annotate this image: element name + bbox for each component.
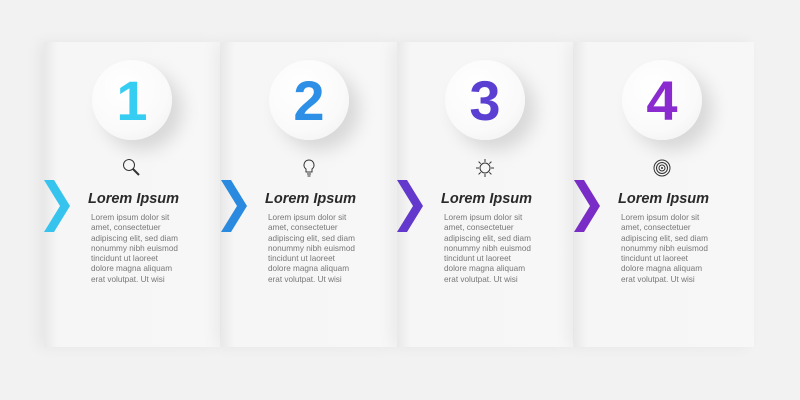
- text block 2: [268, 213, 355, 284]
- text block 3: dolore magna aliquam: [444, 264, 525, 273]
- panel: step 3: [397, 42, 573, 347]
- text block 1: adipiscing elit, sed diam: [91, 234, 178, 243]
- icon: bulb: [303, 160, 314, 176]
- text block 2: Lorem ipsum dolor sit: [268, 213, 346, 222]
- heading 2: Lorem Ipsum: [265, 191, 356, 207]
- text block 4: dolore magna aliquam: [621, 264, 702, 273]
- heading 1: Lorem Ipsum: [88, 191, 179, 207]
- text block 4: Lorem ipsum dolor sit: [621, 213, 699, 222]
- text block 2: tincidunt ut laoreet: [268, 254, 335, 263]
- chevron arrow 1: [44, 180, 70, 232]
- text block 2: nonummy nibh euismod: [268, 244, 355, 253]
- number circle 3: 3: [469, 69, 501, 132]
- text block 3: amet, consectetuer: [444, 223, 514, 232]
- icon: gear: [476, 159, 494, 177]
- text block 2: dolore magna aliquam: [268, 264, 349, 273]
- number circle 2: [269, 60, 349, 140]
- number circle 2: 2: [293, 69, 325, 132]
- text block 2: amet, consectetuer: [268, 223, 338, 232]
- heading 4: Lorem Ipsum: [618, 191, 709, 207]
- text block 1: [91, 213, 178, 284]
- number circle 1: 1: [116, 69, 148, 132]
- text block 2: erat volutpat. Ut wisi: [268, 275, 342, 284]
- text block 3: adipiscing elit, sed diam: [444, 234, 531, 243]
- number circle 3: [445, 60, 525, 140]
- number circle 4: 4: [646, 69, 678, 132]
- text block 1: nonummy nibh euismod: [91, 244, 178, 253]
- text block 3: tincidunt ut laoreet: [444, 254, 511, 263]
- text block 3: erat volutpat. Ut wisi: [444, 275, 518, 284]
- text block 4: tincidunt ut laoreet: [621, 254, 688, 263]
- text block 3: [444, 213, 531, 284]
- text block 2: adipiscing elit, sed diam: [268, 234, 355, 243]
- text block 4: adipiscing elit, sed diam: [621, 234, 708, 243]
- text block 4: [621, 213, 708, 284]
- chevron arrow 2: [221, 180, 247, 232]
- text block 1: dolore magna aliquam: [91, 264, 172, 273]
- chevron arrow 4: [574, 180, 600, 232]
- text block 4: erat volutpat. Ut wisi: [621, 275, 695, 284]
- text block 3: nonummy nibh euismod: [444, 244, 531, 253]
- text block 1: tincidunt ut laoreet: [91, 254, 158, 263]
- text block 1: erat volutpat. Ut wisi: [91, 275, 165, 284]
- text block 4: nonummy nibh euismod: [621, 244, 708, 253]
- heading 3: Lorem Ipsum: [441, 191, 532, 207]
- panel: step 4: [574, 42, 754, 347]
- number circle 4: [622, 60, 702, 140]
- text block 3: Lorem ipsum dolor sit: [444, 213, 522, 222]
- icon: magnifier: [123, 159, 140, 176]
- icon: target: [654, 160, 670, 176]
- text block 1: amet, consectetuer: [91, 223, 161, 232]
- panel: step 2: [221, 42, 397, 347]
- panel: step 1: [44, 42, 220, 347]
- number circle 1: [92, 60, 172, 140]
- text block 1: Lorem ipsum dolor sit: [91, 213, 169, 222]
- chevron arrow 3: [397, 180, 423, 232]
- text block 4: amet, consectetuer: [621, 223, 691, 232]
